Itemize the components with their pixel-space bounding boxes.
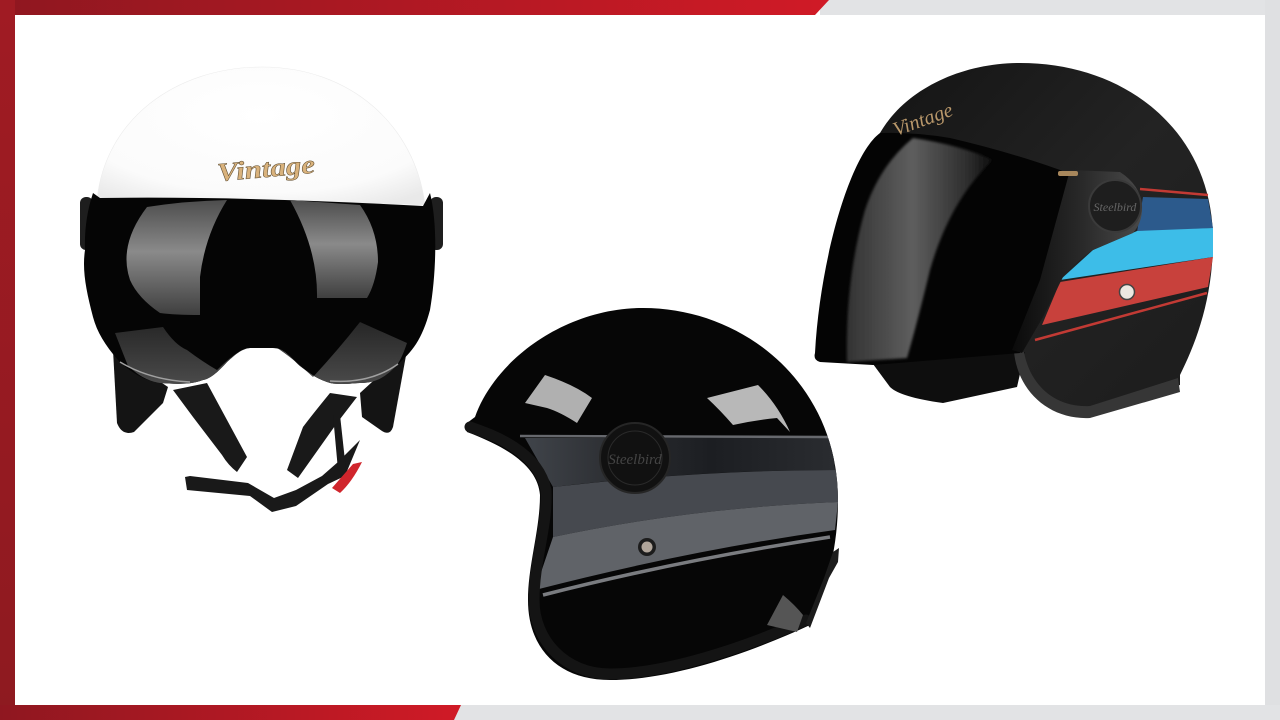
rear clip bbox=[806, 548, 839, 628]
white shell bbox=[97, 67, 425, 205]
badge bbox=[600, 423, 670, 493]
helmet: matte black with coloured stripes bbox=[815, 63, 1213, 418]
shell bbox=[880, 63, 1213, 412]
badge: Steelbird bbox=[608, 452, 662, 468]
stripe bands bbox=[520, 436, 838, 595]
side knobs bbox=[80, 197, 443, 250]
helmet: white front view bbox=[80, 67, 443, 512]
top grey line bbox=[520, 436, 828, 437]
rim bbox=[470, 427, 806, 674]
matte logo: Vintage bbox=[890, 99, 956, 141]
visor pivot plate bbox=[1012, 170, 1142, 353]
visor bbox=[815, 133, 1078, 365]
blue stripe bbox=[1137, 197, 1213, 232]
helmet: black side view with grey stripes bbox=[467, 308, 839, 680]
shell bbox=[467, 308, 838, 680]
band 1 bbox=[525, 438, 835, 487]
red stripe bbox=[1042, 257, 1213, 325]
visor bbox=[84, 193, 435, 384]
inner sun visor bbox=[115, 322, 407, 384]
snap button bbox=[638, 538, 656, 556]
band 2 bbox=[553, 470, 838, 537]
white logo: Vintage bbox=[216, 150, 316, 187]
side cheek flaps bbox=[113, 350, 407, 433]
chin padding bbox=[873, 352, 1025, 403]
snap bbox=[1120, 284, 1134, 300]
thin red lines bbox=[1035, 189, 1208, 340]
highlights bbox=[525, 375, 803, 632]
band 3 bbox=[535, 502, 838, 590]
chin straps bbox=[173, 383, 362, 512]
pivot badge bbox=[1089, 180, 1141, 232]
lower grey line bbox=[543, 537, 830, 595]
visor lower lip highlight bbox=[120, 362, 398, 382]
visor reflection bbox=[847, 138, 993, 362]
visor rivet bbox=[1058, 171, 1078, 176]
pivot badge: Steelbird bbox=[1094, 200, 1137, 214]
rim bbox=[1014, 352, 1180, 418]
cyan stripe bbox=[1060, 228, 1213, 280]
visor reflections bbox=[126, 200, 227, 315]
